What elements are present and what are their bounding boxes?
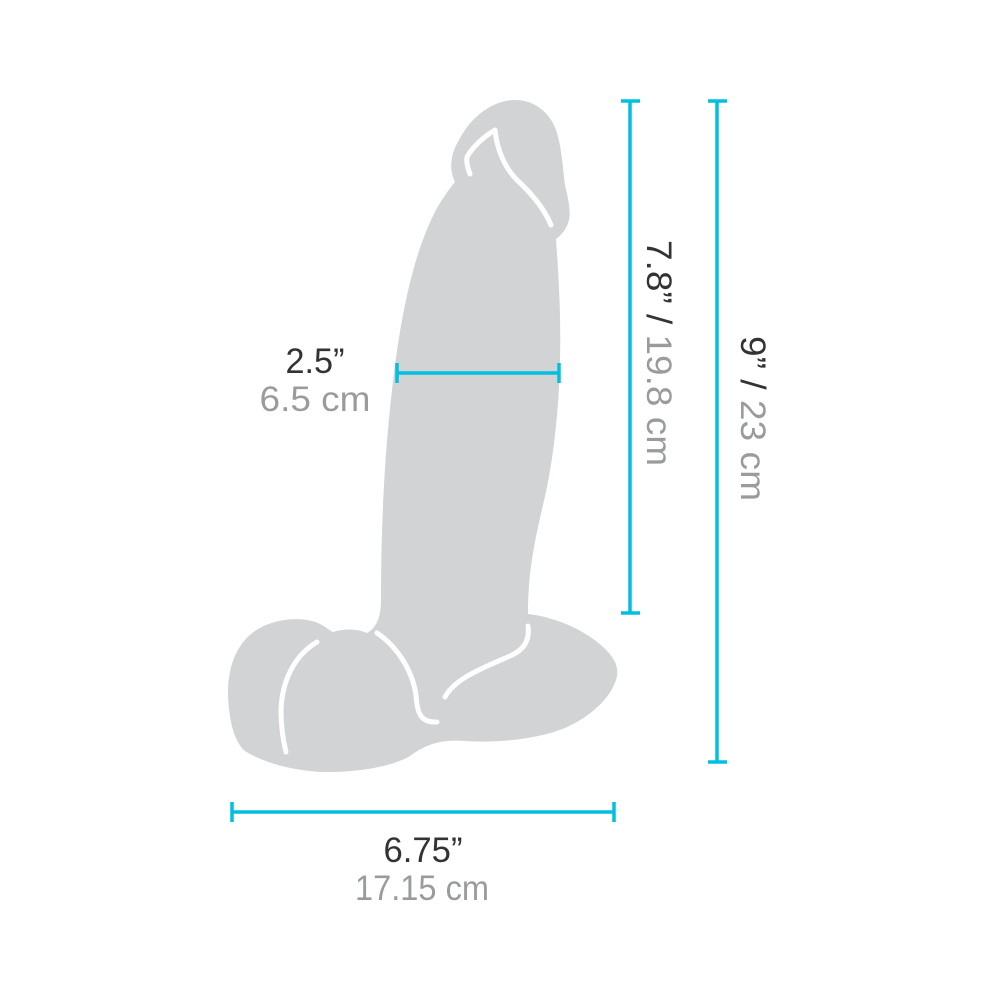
label: 17.15 cm: 17.15 cm: [355, 869, 489, 908]
measure: length 7.8 in: [621, 101, 640, 613]
measure: height 9 in: [708, 101, 727, 762]
label: 6.5 cm: 6.5 cm: [260, 380, 370, 419]
label: 6.75 in: 6.75”: [384, 831, 462, 870]
contour line: left fold: [281, 642, 317, 752]
contour line: right fold: [445, 626, 528, 697]
contour line: head: [467, 130, 551, 225]
contour line: centre fold: [377, 633, 437, 722]
product silhouette: [228, 100, 617, 772]
measure: width 6.75 in: [232, 802, 614, 822]
label: 9 in / 23 cm: 9” / 23 cm: [733, 336, 772, 501]
label: 7.8 in / 19.8 cm: 7.8” / 19.8 cm: [639, 240, 678, 466]
label: 2.5 in: 2.5”: [286, 342, 344, 381]
measure: diameter 2.5 in: [397, 363, 559, 383]
